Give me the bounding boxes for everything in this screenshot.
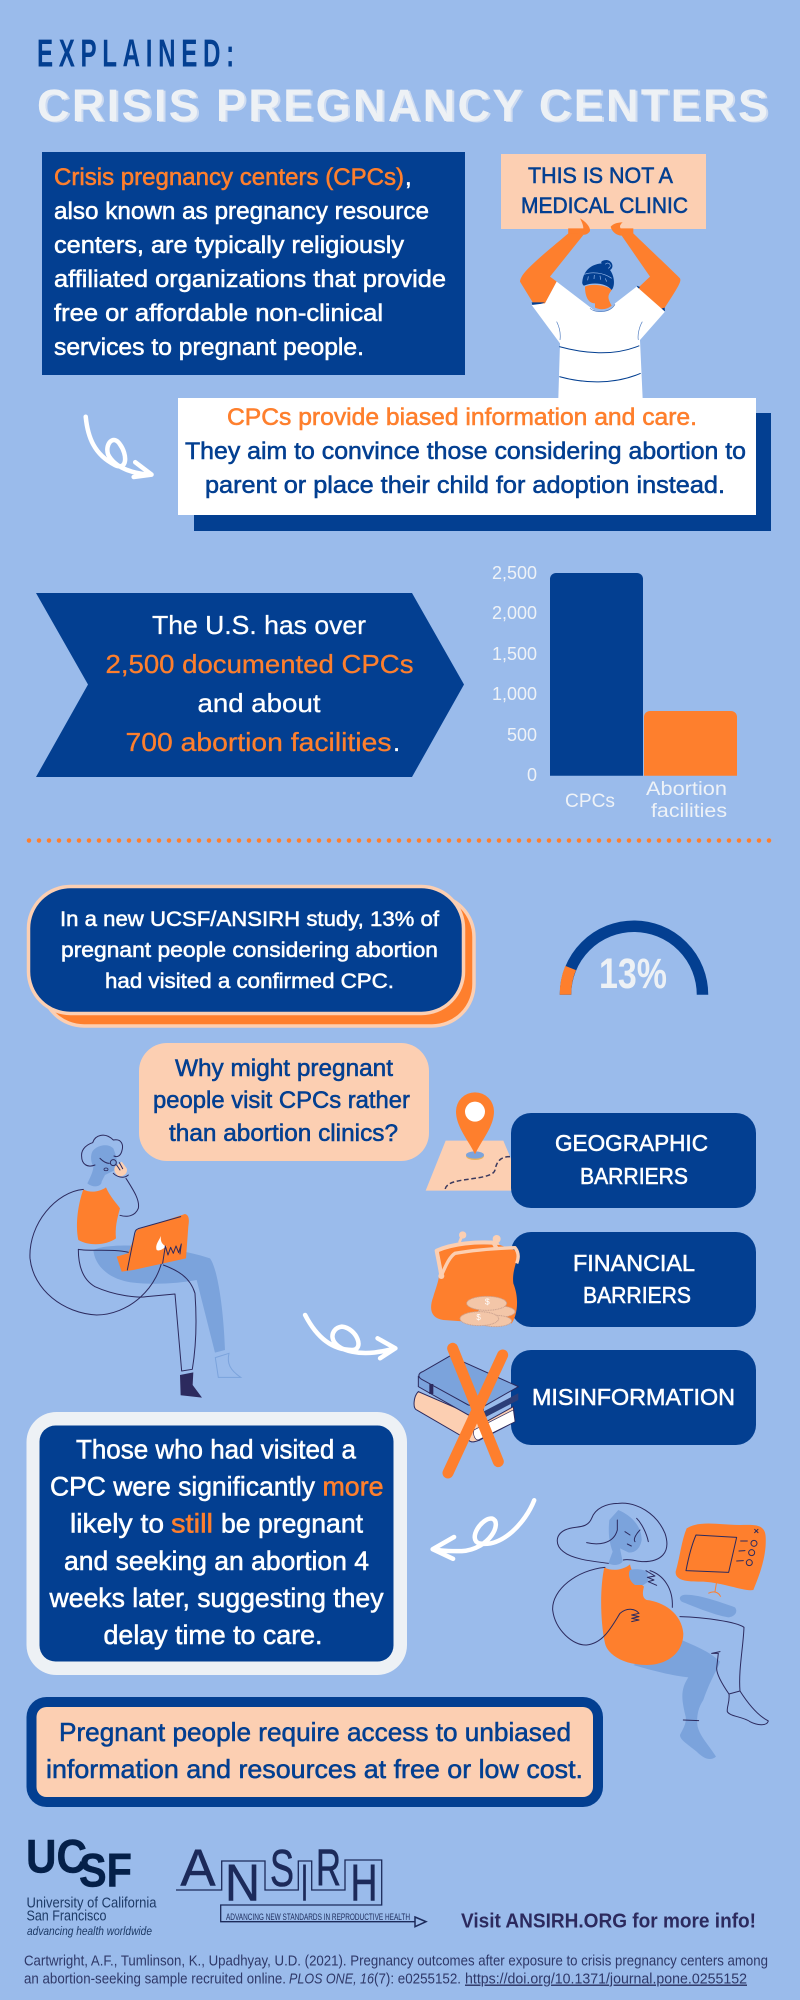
- barrier: misinformation: [511, 1350, 756, 1445]
- logo: ANSIRH: N: [225, 1855, 260, 1913]
- icon: coin purse: [431, 1231, 518, 1327]
- callout: 13 percent study finding: pregnant people considering abortion: [61, 938, 438, 962]
- banner: number of CPCs vs abortion facilities: 2,500 documented CPCs: [106, 649, 413, 679]
- logo: UCSF: UC: [26, 1830, 87, 1882]
- barrier: misinformation: MISINFORMATION: [532, 1384, 735, 1410]
- logo: ANSIRH: A: [180, 1840, 216, 1898]
- icon: coin purse: $: [485, 1296, 490, 1306]
- panel: delay in care finding: Those who had visited a: [76, 1434, 357, 1464]
- illustration: person with laptop: [30, 1135, 241, 1398]
- citation: (7): e0255152.: [374, 1972, 461, 1988]
- citation: PLOS ONE, 16: [289, 1972, 375, 1988]
- panel: CPC definition: affiliated organizations that provide: [54, 266, 446, 293]
- y axis labels: 500: [507, 725, 537, 745]
- arrow: squiggle to biased care box: [86, 417, 152, 477]
- logo: ANSIRH: [176, 1840, 426, 1927]
- logo: UCSF: University of California: [26, 1896, 157, 1912]
- y axis labels: 2,000: [492, 603, 537, 623]
- callout: 13 percent study finding: [28, 886, 474, 1026]
- title: Crisis Pregnancy Centers: CRISIS PREGNANCY CENTERS: [37, 80, 768, 131]
- y axis labels: 2,500: [492, 563, 537, 583]
- panel: CPC definition: ,: [405, 164, 412, 191]
- panel: delay in care finding: weeks later, suggesting they: [49, 1583, 384, 1613]
- arrow: squiggle to delay panel: [433, 1500, 534, 1559]
- eyebrow heading: Explained: EXPLAINED:: [37, 32, 234, 75]
- logo: ANSIRH: ADVANCING NEW STANDARDS IN REPRODUCTIVE HEALTH: [226, 1912, 410, 1922]
- call to action: visit ANSIRH: Visit ANSIRH.ORG for more info!: [461, 1910, 756, 1932]
- callout: 13 percent study finding: In a new UCSF/ANSIRH study, 13% of: [60, 907, 439, 931]
- citation: an abortion-seeking sample recruited online.: [24, 1972, 286, 1988]
- panel: delay in care finding: CPC were significantly: [50, 1472, 315, 1502]
- logo: ANSIRH: I: [301, 1855, 308, 1913]
- barrier: financial: [511, 1232, 756, 1327]
- logo: UCSF: SF: [79, 1844, 132, 1896]
- bar chart: CPCs vs abortion facilities: [492, 563, 737, 822]
- barrier: geographic: [511, 1113, 756, 1208]
- banner: number of CPCs vs abortion facilities: [36, 593, 464, 777]
- citation: [24, 1954, 768, 1988]
- logo: UCSF: San Francisco: [26, 1908, 106, 1924]
- arrow: squiggle to barriers: [305, 1315, 395, 1358]
- panel: CPC definition: also known as pregnancy resource: [54, 198, 429, 225]
- barrier: financial: BARRIERS: [583, 1282, 691, 1308]
- panel: delay in care finding: be pregnant: [221, 1508, 363, 1538]
- callout: 13 percent study finding: had visited a confirmed CPC.: [105, 969, 394, 993]
- speech bubble: why visit CPCs: people visit CPCs rather: [153, 1087, 410, 1114]
- citation: https://doi.org/10.1371/journal.pone.0255152: [465, 1972, 747, 1988]
- panel: CPC definition: free or affordable non-clinical: [54, 300, 383, 327]
- logo: UCSF: advancing health worldwide: [27, 1924, 152, 1938]
- panel: CPC definition: centers, are typically religiously: [54, 232, 404, 259]
- sign: this is not a medical clinic: MEDICAL CLINIC: [521, 193, 688, 218]
- logo: ANSIRH: S: [270, 1840, 294, 1898]
- logo: ANSIRH: R: [316, 1840, 341, 1898]
- gauge: 13 percent: 13%: [599, 950, 667, 998]
- sign: this is not a medical clinic: [501, 154, 706, 229]
- y axis labels: 0: [527, 765, 537, 785]
- callout: biased information and care: They aim to convince those considering abortion to: [185, 438, 746, 465]
- panel: delay in care finding: and seeking an abortion 4: [64, 1546, 369, 1576]
- icon: map pin: [426, 1092, 524, 1191]
- callout: biased information and care: [178, 398, 771, 531]
- y axis labels: [492, 563, 537, 785]
- banner: number of CPCs vs abortion facilities: The U.S. has over: [152, 610, 366, 640]
- banner: number of CPCs vs abortion facilities: 700 abortion facilities: [126, 727, 392, 757]
- x axis labels: Abortion: [646, 779, 727, 800]
- panel: delay in care finding: delay time to care.: [104, 1620, 322, 1650]
- icon: books crossed out: [414, 1348, 518, 1473]
- conclusion box: information and resources at free or low cost.: [46, 1754, 583, 1784]
- speech bubble: why visit CPCs: [139, 1043, 429, 1161]
- x axis labels: facilities: [651, 801, 727, 822]
- conclusion box: Pregnant people require access to unbiased: [59, 1717, 571, 1747]
- speech bubble: why visit CPCs: Why might pregnant: [175, 1055, 393, 1082]
- illustration: person holding sign: [520, 218, 680, 398]
- icon: coin purse: $: [476, 1313, 481, 1322]
- banner: number of CPCs vs abortion facilities: and about: [198, 688, 321, 718]
- barrier: geographic: GEOGRAPHIC: [555, 1130, 708, 1156]
- y axis labels: 1,500: [492, 644, 537, 664]
- sign: this is not a medical clinic: THIS IS NOT A: [528, 163, 673, 188]
- logo: UCSF: [26, 1830, 157, 1938]
- y axis labels: 1,000: [492, 684, 537, 704]
- panel: delay in care finding: still: [171, 1508, 213, 1538]
- conclusion box: [26, 1697, 603, 1807]
- bar: abortion facilities: [644, 711, 737, 776]
- x axis labels: [565, 779, 727, 822]
- gauge: 13 percent: [565, 926, 702, 998]
- panel: delay in care finding: [26, 1412, 407, 1675]
- callout: biased information and care: parent or place their child for adoption instead.: [205, 472, 725, 499]
- banner: number of CPCs vs abortion facilities: .: [393, 727, 400, 757]
- logo: ANSIRH: H: [350, 1855, 378, 1913]
- panel: CPC definition: [42, 152, 465, 375]
- barrier: geographic: BARRIERS: [580, 1163, 688, 1189]
- barrier: financial: FINANCIAL: [573, 1250, 695, 1276]
- bar: CPCs: [550, 573, 643, 776]
- panel: CPC definition: Crisis pregnancy centers (CPCs): [54, 164, 404, 191]
- panel: CPC definition: services to pregnant people.: [54, 334, 364, 361]
- panel: delay in care finding: more: [322, 1472, 384, 1502]
- speech bubble: why visit CPCs: than abortion clinics?: [169, 1120, 398, 1147]
- callout: biased information and care: CPCs provide biased information and care.: [227, 404, 697, 431]
- x axis labels: CPCs: [565, 791, 615, 812]
- panel: delay in care finding: likely to: [70, 1508, 164, 1538]
- illustration: pregnant person at monitor: [553, 1503, 768, 1759]
